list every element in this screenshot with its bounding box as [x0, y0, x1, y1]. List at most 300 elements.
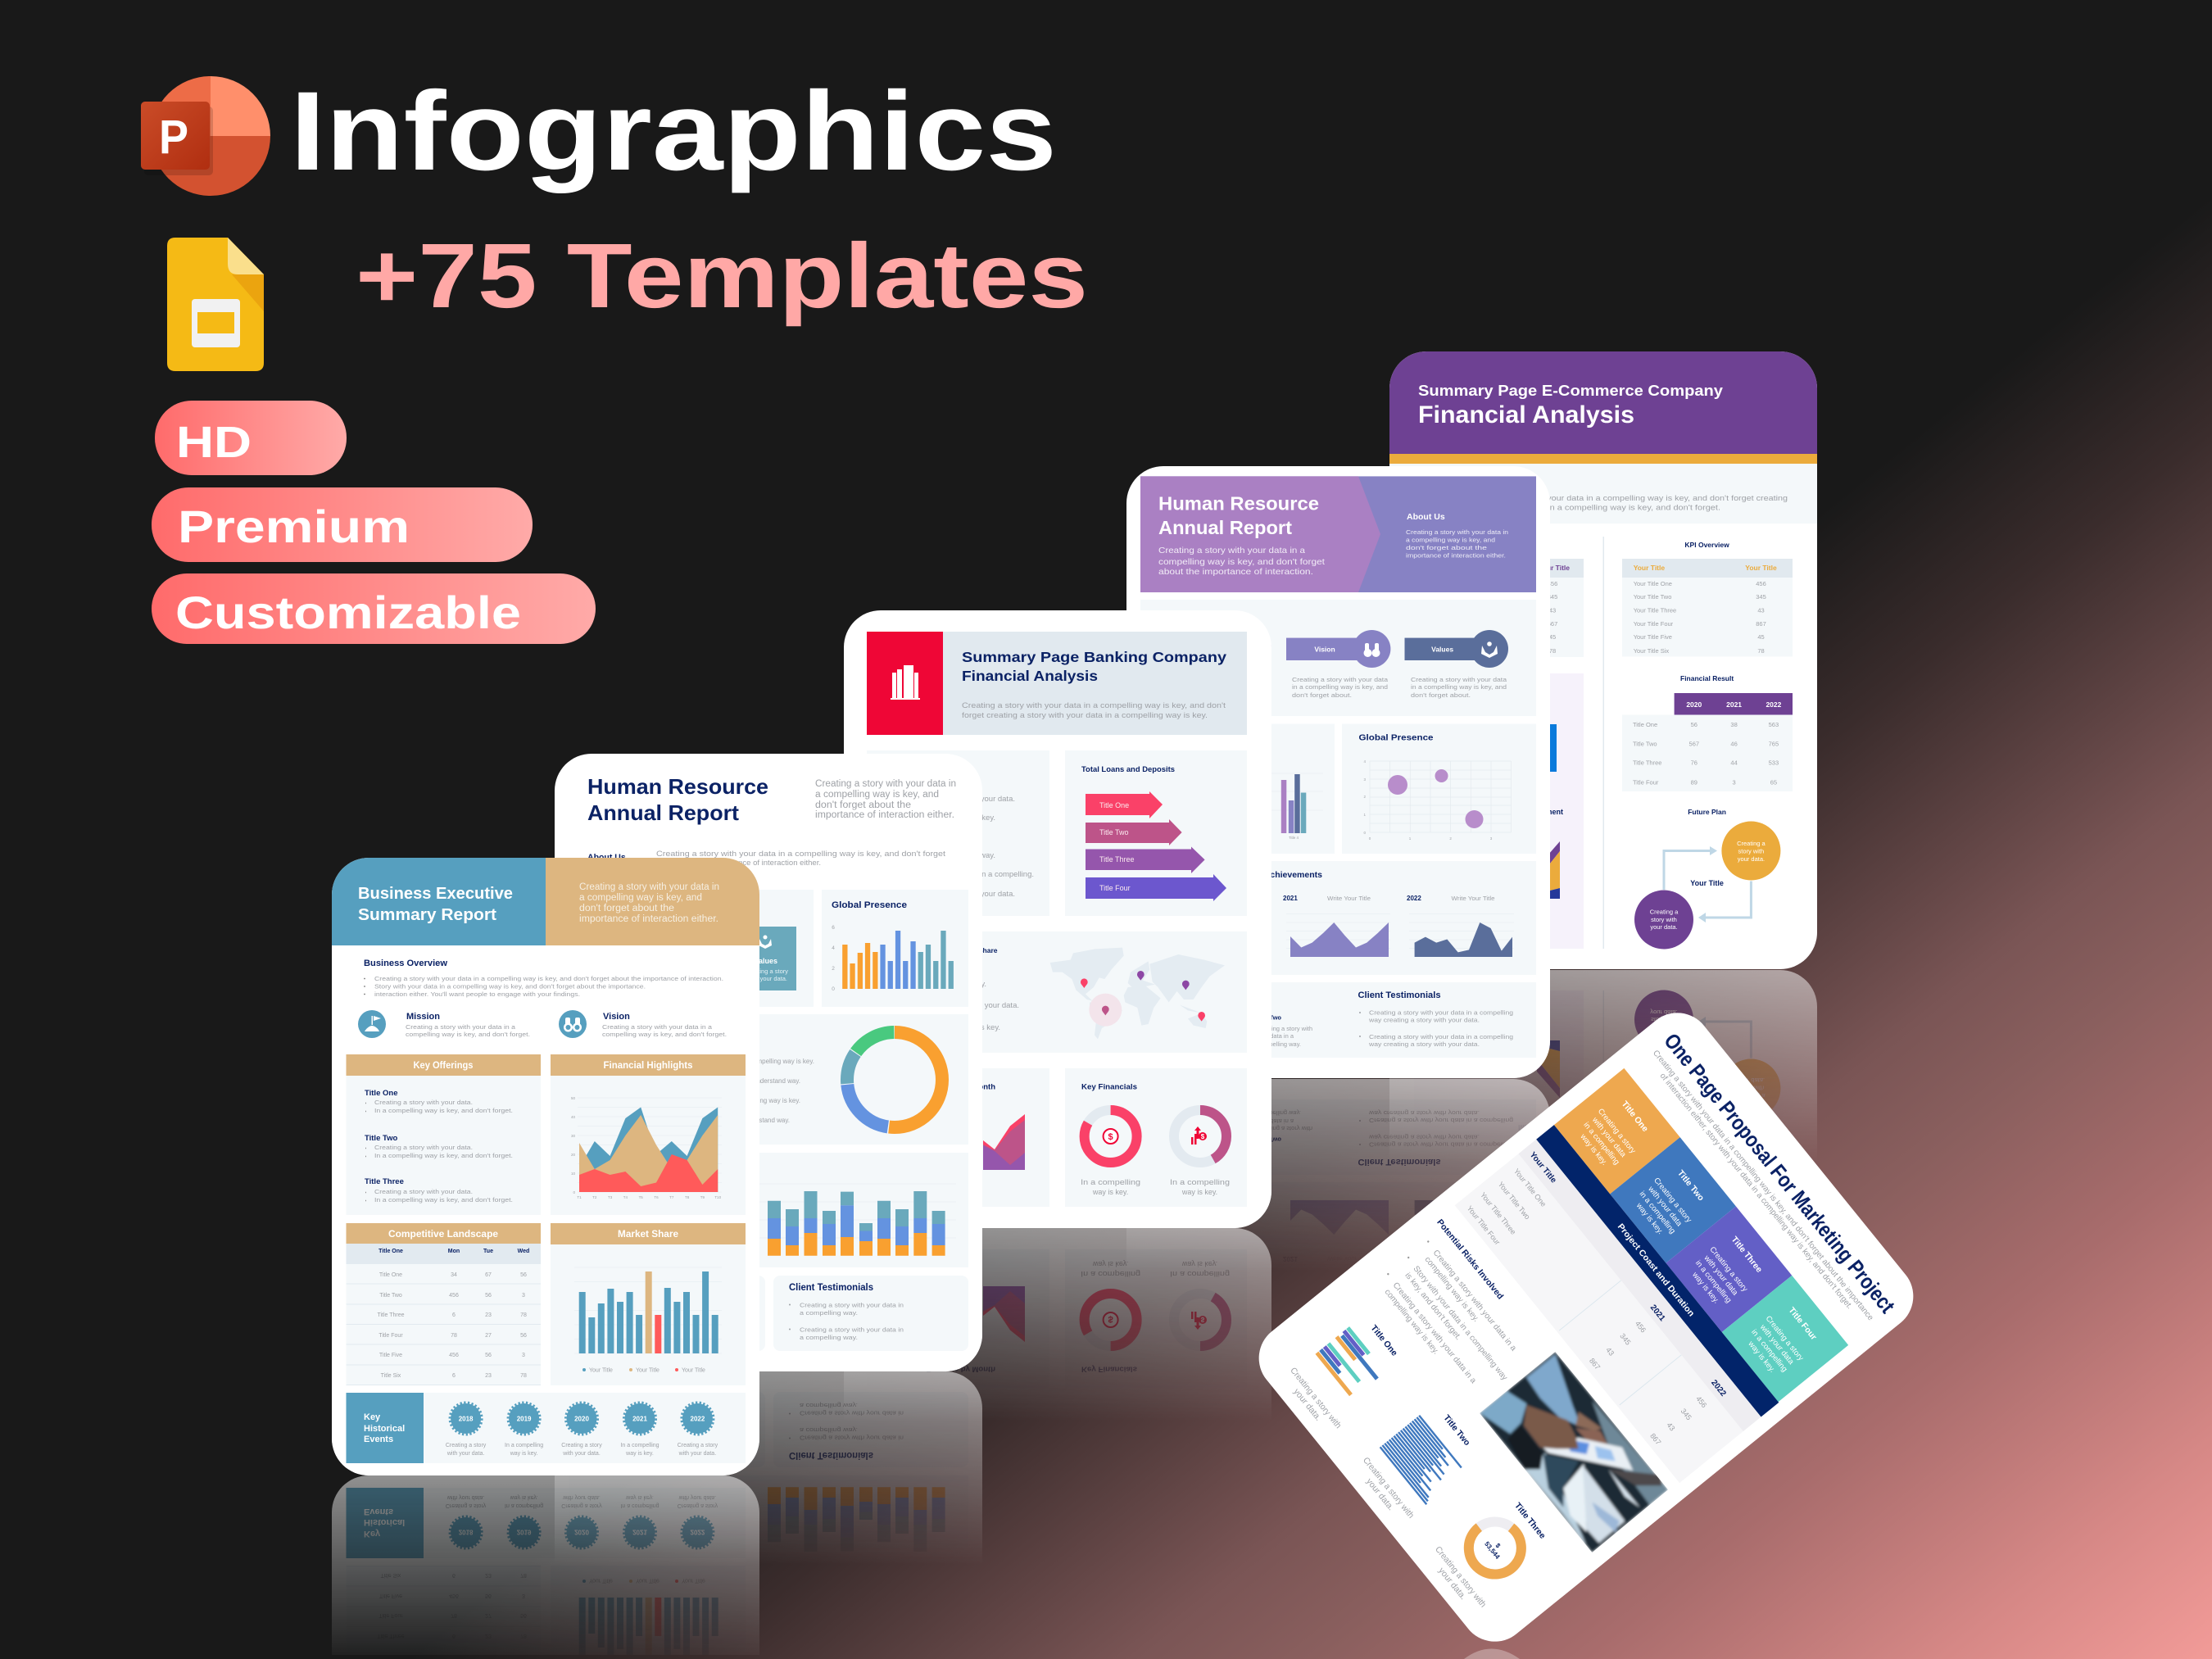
donut chart panel: Easy to understand way. — [729, 1077, 800, 1085]
financial result table: 38 — [1730, 721, 1738, 728]
mission: compelling way is key, and don't forget. — [406, 1032, 530, 1038]
stacked bar chart panel — [569, 1153, 968, 1267]
key offerings panel: Title Three — [365, 1177, 404, 1186]
key historical events timeline: with your data. — [446, 1451, 484, 1457]
arrows: total loans and deposits: Title Three — [1099, 855, 1135, 863]
left column partial table — [1550, 559, 1584, 657]
future plan diagram: story with — [1738, 847, 1764, 855]
vision and values panel: in a compelling way is key, and — [1411, 683, 1507, 691]
financial result table: 765 — [1769, 741, 1779, 748]
business overview: interaction either. You'll want people to engage with your findings. — [374, 992, 580, 998]
business overview: Story with your data in a compelling way is key, and don't forget about the importance. — [374, 985, 646, 990]
key financials rings: Key Financials — [1081, 1083, 1137, 1091]
project table: Your Title Four — [1466, 1204, 1502, 1246]
arrows: total loans and deposits — [1065, 750, 1247, 916]
header chevron: Creating a story with your data in — [1406, 528, 1508, 536]
values panel — [569, 890, 814, 1007]
four coloured title blocks: with your data — [1646, 1184, 1684, 1229]
vision and values panel: Creating a story with your data — [1292, 676, 1389, 683]
financial highlights area chart — [551, 1054, 746, 1215]
header: Summary Report — [358, 906, 496, 924]
table row: Title Two — [379, 1293, 525, 1299]
key offerings panel: Title Two — [365, 1134, 397, 1143]
vision and values panel: Vision — [1314, 646, 1335, 654]
competitive landscape table — [346, 1223, 541, 1296]
KPI overview table: 43 — [1757, 606, 1765, 614]
financial result table: 46 — [1730, 741, 1738, 748]
key historical events timeline: Creating a story — [678, 1443, 718, 1448]
arrows: total loans and deposits: Total Loans and Deposits — [1081, 765, 1175, 774]
four coloured title blocks: in a compelling — [1693, 1258, 1733, 1305]
financial result table: 89 — [1691, 778, 1698, 786]
financial result table: 533 — [1769, 759, 1779, 767]
financial result table: 2020 — [1686, 700, 1702, 709]
key achievements area charts: 2021 — [1283, 895, 1298, 902]
market share bars and legend: Your Title — [636, 1368, 660, 1373]
vision and values panel: don't forget about. — [1411, 691, 1471, 699]
client testimonials panel: Creating a story with your data in — [800, 1326, 904, 1334]
left column partial table: 567 — [1548, 620, 1557, 628]
KPI overview table: Your Title Three — [1634, 606, 1676, 614]
world map panel: is key. — [979, 1023, 1000, 1032]
header chevron: importance of interaction either. — [1406, 552, 1506, 559]
financial result table: Title One — [1633, 721, 1657, 728]
financial highlights area chart: 20 — [571, 1153, 575, 1157]
testimonials panel: Title Two — [1255, 1014, 1281, 1021]
key achievements area charts: Write Your Title — [1327, 895, 1371, 902]
four coloured title blocks: Title Four — [1787, 1305, 1819, 1342]
header chevron: compelling way is key, and don't forget — [1158, 557, 1325, 567]
four coloured title blocks: Creating a story — [1652, 1176, 1693, 1225]
competitive landscape table: Title One — [379, 1272, 402, 1278]
table rows: 78 — [451, 1333, 457, 1339]
key achievements area charts: Key Achievements — [1246, 870, 1322, 880]
vision: compelling way is key, and don't forget. — [602, 1032, 727, 1038]
chart: title three donut: $ — [1494, 1542, 1503, 1550]
KPI overview table: 78 — [1757, 647, 1765, 655]
four coloured title blocks: Creating a story — [1707, 1245, 1749, 1294]
KPI overview table: 456 — [1756, 580, 1766, 587]
left column partial table: 45 — [1549, 633, 1556, 641]
KPI overview table: Your Title One — [1634, 580, 1672, 587]
testimonials panel — [1140, 982, 1536, 1058]
financial highlights area chart: 30 — [571, 1134, 575, 1138]
KPI overview table: Your Title Six — [1634, 647, 1669, 655]
chart: title two: Creating a story with — [1361, 1456, 1416, 1521]
card: Human Resource Annual Report purple — [1126, 466, 1550, 1078]
client testimonials panel: Creating a story with your data in — [800, 1301, 904, 1309]
key financials rings: $ — [1201, 1133, 1205, 1140]
client testimonials panel: a compelling way. — [800, 1334, 858, 1341]
arrows: total loans and deposits: Title Two — [1099, 828, 1129, 836]
key financials rings: In a compelling — [1081, 1178, 1140, 1186]
testimonials panel: Creating a story with — [1257, 1025, 1312, 1032]
market share bars and legend: Your Title — [589, 1368, 613, 1373]
financial result table: Title Two — [1633, 741, 1657, 748]
header band — [1389, 351, 1817, 464]
market share bars and legend — [551, 1296, 746, 1385]
left column partial table: 345 — [1548, 593, 1557, 601]
badge: Customizable — [152, 573, 596, 644]
header chevron: Human Resource — [1158, 493, 1319, 514]
icon: PowerPoint logo — [141, 76, 270, 196]
table rows: Title Six — [381, 1373, 401, 1379]
financial result table: 76 — [1691, 759, 1698, 767]
project table: 345 — [1618, 1332, 1632, 1347]
world map panel: your data. — [985, 1001, 1019, 1010]
financial result table: Title Three — [1633, 759, 1661, 767]
financial highlights area chart: T9 — [700, 1195, 705, 1199]
project table: 2021 — [1648, 1303, 1667, 1323]
table rows: 456 — [449, 1353, 459, 1358]
chart: title one — [1280, 1309, 1412, 1437]
values panel: Creating a story — [745, 968, 788, 975]
KPI overview table: Your Title — [1745, 564, 1777, 572]
key financials rings: $ — [1108, 1132, 1113, 1142]
chart: title one: Title One — [1369, 1323, 1399, 1358]
header: Creating a story with your data in a compelling way is key, and don't — [962, 701, 1226, 710]
key offerings panel: Key Offerings — [413, 1059, 474, 1071]
competitive landscape table: Competitive Landscape — [388, 1228, 498, 1240]
key offerings panel: Creating a story with your data. — [374, 1145, 473, 1151]
header: Creating a story with your data in — [579, 882, 719, 892]
future plan diagram: Your Title — [1690, 879, 1724, 887]
title: Infographics — [290, 69, 1057, 194]
intro text panel: Creating a story with your data in a compelling way is key, and don't forget creating — [1464, 494, 1788, 503]
KPI overview table: Your Title Five — [1634, 633, 1672, 641]
arrows: total loans and deposits: Title One — [1099, 801, 1129, 809]
client testimonials panel: a compelling way. — [800, 1309, 858, 1317]
four coloured title blocks: Title Two — [1675, 1168, 1706, 1203]
donut chart panel — [569, 1014, 968, 1145]
chart: title one: your data. — [1291, 1387, 1323, 1423]
table row: Title Two: 56 — [485, 1293, 492, 1299]
project table: 43 — [1604, 1346, 1616, 1358]
area chart panel: Revenue by Month — [927, 1083, 995, 1091]
chart: title two: your data. — [1364, 1476, 1396, 1512]
four coloured title blocks: way is key. — [1634, 1201, 1665, 1236]
table row: Title Two: 3 — [522, 1293, 525, 1299]
key historical events timeline: Historical — [364, 1424, 405, 1434]
global presence bar chart — [822, 890, 968, 1007]
chart: title three donut: Creating a story with — [1433, 1544, 1488, 1610]
key historical events timeline: Key — [364, 1412, 381, 1422]
four coloured title blocks: with your data — [1757, 1322, 1796, 1367]
project table: 43 — [1665, 1421, 1677, 1432]
key historical events timeline: 2019 — [517, 1416, 532, 1422]
business overview: Creating a story with your data in a compelling way is key, and don't forget about the importance of interaction. — [374, 977, 723, 982]
vision and values panel: Values — [1431, 646, 1453, 654]
KPI overview table: 345 — [1756, 593, 1766, 601]
key offerings panel: In a compelling way is key, and don't forget. — [374, 1198, 513, 1203]
four coloured title blocks: with your data — [1702, 1253, 1740, 1298]
values panel: Values — [754, 957, 777, 965]
four coloured title blocks: with your data — [1589, 1115, 1628, 1159]
project table: 345 — [1679, 1407, 1693, 1421]
financial result table: 567 — [1689, 741, 1699, 748]
lower card sections — [844, 926, 1271, 1228]
icon: PowerPoint logo: P — [159, 111, 188, 164]
global presence bubble chart: 0 — [1369, 836, 1371, 841]
header band: Summary Page E-Commerce Company — [1418, 383, 1723, 399]
financial highlights area chart: Financial Highlights — [603, 1059, 693, 1071]
vision: Creating a story with your data in a — [602, 1025, 712, 1031]
table rows: 56 — [520, 1333, 527, 1339]
left column partial table: 456 — [1548, 580, 1557, 587]
table row: Title Two: Title Two — [379, 1293, 402, 1299]
header chevron: a compelling way is key, and — [1406, 536, 1495, 544]
key offerings panel: In a compelling way is key, and don't forget. — [374, 1108, 513, 1114]
key offerings panel: In a compelling way is key, and don't forget. — [374, 1154, 513, 1159]
left list panel: your data. — [981, 795, 1015, 804]
left list panel: in a compelling. — [980, 870, 1034, 879]
project table: 456 — [1694, 1394, 1708, 1409]
financial result table: 2021 — [1726, 700, 1742, 709]
financial highlights area chart: T5 — [639, 1195, 643, 1199]
potential risks — [1369, 1217, 1547, 1405]
world map panel: key. — [972, 980, 986, 989]
chart: title two: Title Two — [1441, 1413, 1472, 1448]
key financials rings: way is key. — [1092, 1188, 1128, 1196]
about us: about the importance of interaction either. — [678, 859, 821, 868]
key historical events timeline: way is key. — [510, 1451, 538, 1457]
key offerings panel: Creating a story with your data. — [374, 1190, 473, 1195]
financial highlights area chart: T7 — [669, 1195, 674, 1199]
key historical events timeline: 2020 — [574, 1416, 589, 1422]
key financials rings — [1065, 1068, 1247, 1207]
card: Summary Page E-Commerce Company — [1389, 351, 1817, 969]
financial highlights area chart: 40 — [571, 1115, 575, 1119]
financial highlights area chart: T4 — [623, 1195, 628, 1199]
future plan diagram: story with — [1651, 916, 1677, 923]
global presence bar chart: 6 — [832, 925, 835, 931]
market share bar chart: Market Share — [618, 1228, 678, 1240]
photo: hands on tablet — [1480, 1352, 1668, 1552]
card body sections — [1126, 596, 1550, 1078]
card: Business Executive Summary Report — [332, 858, 759, 1475]
testimonials panel: way creating a story with your data. — [1368, 1040, 1480, 1048]
market share bars and legend: Your Title — [682, 1368, 705, 1373]
vision and values panel: don't forget about. — [1292, 691, 1352, 699]
partial bar chart panel — [1271, 724, 1335, 854]
financial highlights area chart: T2 — [592, 1195, 597, 1199]
about us: About Us — [587, 852, 626, 862]
testimonials panel: way creating a story with your data. — [1368, 1016, 1480, 1024]
project table: 867 — [1648, 1432, 1662, 1447]
financial result table: 3 — [1733, 778, 1736, 786]
project table: Your Title — [1528, 1150, 1558, 1185]
testimonials panel: your data in a — [1257, 1032, 1294, 1040]
future plan diagram: Creating a — [1650, 908, 1679, 916]
key historical events timeline: Events — [364, 1435, 393, 1444]
badge: HD — [155, 401, 347, 475]
card: Summary Page Banking Company — [844, 610, 1271, 1228]
table rows — [346, 1296, 541, 1385]
header — [867, 632, 1247, 735]
chart: title three donut: your data. — [1436, 1566, 1468, 1602]
four coloured title blocks: Creating a story — [1596, 1107, 1638, 1155]
table rows: Title Five — [379, 1353, 402, 1358]
chart: title one: Creating a story with — [1288, 1366, 1344, 1430]
financial highlights area chart: 50 — [571, 1096, 575, 1100]
lower card sections — [332, 1296, 759, 1475]
four coloured title blocks: in a compelling — [1581, 1121, 1621, 1167]
heading: Human Resource — [587, 774, 768, 799]
KPI overview table: Your Title — [1634, 564, 1665, 572]
four coloured title blocks: Creating a story — [1764, 1314, 1806, 1362]
table rows: 78 — [520, 1312, 527, 1318]
chart: title three donut: Title Three — [1512, 1501, 1548, 1541]
four coloured title blocks: in a compelling — [1749, 1328, 1789, 1374]
global presence bar chart: 4 — [832, 945, 835, 951]
badge: Premium — [152, 487, 533, 562]
table rows: 56 — [485, 1353, 492, 1358]
table rows: 3 — [522, 1353, 525, 1358]
key historical events timeline: 2018 — [459, 1416, 474, 1422]
chart: title two — [1353, 1399, 1485, 1527]
left column chart panel — [1519, 673, 1584, 1131]
project table — [1455, 1140, 1761, 1483]
financial highlights area chart: T6 — [654, 1195, 659, 1199]
vision and values panel — [1140, 600, 1536, 716]
key offerings panel: Title One — [365, 1089, 397, 1098]
table rows: 6 — [452, 1373, 456, 1379]
table rows: 27 — [485, 1333, 492, 1339]
four coloured title blocks: way is key. — [1746, 1339, 1777, 1375]
lower card sections — [555, 1149, 982, 1371]
financial highlights area chart: T1 — [577, 1195, 582, 1199]
key historical events timeline: 2021 — [632, 1416, 647, 1422]
KPI overview table: Your Title Four — [1634, 620, 1674, 628]
competitive landscape table: 56 — [520, 1272, 527, 1278]
competitive landscape table: Mon — [448, 1249, 460, 1254]
mission: Mission — [406, 1012, 440, 1022]
header chevron: don't forget about the — [1406, 544, 1487, 551]
table rows: 6 — [452, 1312, 456, 1318]
potential risks: Creating a story with your data in a — [1431, 1249, 1518, 1353]
financial result table — [1622, 674, 1793, 791]
left column partial table: 43 — [1549, 606, 1556, 614]
header chevron: About Us — [1407, 512, 1445, 522]
four coloured title blocks: way is key. — [1690, 1270, 1720, 1305]
global presence bar chart: Global Presence — [832, 900, 907, 910]
icon: Google Slides logo — [167, 238, 264, 371]
left list panel — [867, 750, 1049, 916]
table rows: Title Three — [377, 1312, 405, 1318]
key historical events timeline: way is key. — [625, 1451, 654, 1457]
future plan diagram: your data. — [1650, 923, 1678, 931]
header: importance of interaction either. — [579, 914, 718, 924]
header: Summary Page Banking Company — [962, 649, 1226, 665]
intro text panel: a story with your data in a compelling way is key, and don't forget. — [1460, 503, 1720, 513]
navy band: Project Coast and Duration — [1616, 1222, 1697, 1318]
potential risks: Potential Risks Involved — [1435, 1217, 1505, 1301]
vision — [559, 1010, 727, 1038]
financial highlights area chart: T10 — [714, 1195, 722, 1199]
vision and values panel: in a compelling way is key, and — [1292, 683, 1388, 691]
header chevron — [1140, 476, 1536, 592]
financial result table: 44 — [1730, 759, 1738, 767]
table row: Title Two: 456 — [449, 1293, 459, 1299]
header — [332, 858, 759, 945]
chart: title three donut: 53,544 — [1483, 1540, 1502, 1561]
future plan diagram: Future Plan — [1688, 808, 1726, 816]
competitive landscape table: Title One — [378, 1249, 403, 1254]
card: One Page Proposal For Marketing Project — [1245, 999, 1927, 1656]
key historical events timeline: In a compelling — [505, 1443, 543, 1448]
business overview — [364, 959, 723, 998]
four coloured title blocks: way is key. — [1578, 1131, 1609, 1167]
vision: Vision — [603, 1012, 630, 1022]
header: Financial Analysis — [962, 668, 1098, 684]
potential risks: Creating a story with your data in a — [1391, 1281, 1478, 1385]
future plan diagram — [1634, 808, 1780, 949]
intro text panel — [1389, 464, 1817, 524]
testimonials panel: compelling way. — [1258, 1040, 1301, 1048]
badge: Premium: Premium — [178, 501, 410, 552]
key historical events timeline: Creating a story — [446, 1443, 487, 1448]
project table: Your Title One — [1512, 1167, 1548, 1208]
four coloured title blocks: Title One — [1620, 1099, 1650, 1134]
financial highlights area chart: 0 — [573, 1190, 575, 1194]
key historical events timeline: In a compelling — [620, 1443, 660, 1448]
project table: 867 — [1588, 1357, 1602, 1371]
financial result table: 2022 — [1766, 700, 1782, 709]
key achievements area charts: 2022 — [1407, 895, 1421, 902]
table rows: Title Four — [378, 1333, 403, 1339]
global presence bubble chart: 1 — [1409, 836, 1412, 841]
project table: Your Title Three — [1479, 1190, 1517, 1236]
global presence bubble chart: Global Presence — [1358, 734, 1434, 743]
global presence bubble chart: 1 — [1363, 813, 1366, 817]
competitive landscape table: 67 — [485, 1272, 492, 1278]
potential risks: compelling way is key. — [1383, 1288, 1440, 1356]
key financials rings: way is key. — [1181, 1188, 1217, 1196]
world map panel — [867, 931, 1247, 1053]
KPI overview table: 45 — [1757, 633, 1765, 641]
header: don't forget about the — [579, 904, 674, 913]
world map panel: Market Share — [954, 946, 998, 954]
four coloured title blocks: in a compelling — [1638, 1190, 1677, 1235]
intro text: a compelling way is key, and — [815, 790, 939, 800]
future plan diagram: Creating a — [1737, 840, 1766, 847]
header: Business Executive — [358, 885, 513, 903]
heading: Annual Report — [587, 800, 739, 825]
client testimonials panel — [569, 1276, 968, 1351]
global presence bubble chart: 3 — [1490, 836, 1493, 841]
competitive landscape table: Wed — [518, 1249, 529, 1254]
financial highlights area chart: T3 — [608, 1195, 613, 1199]
global presence bubble chart: 3 — [1363, 777, 1366, 782]
key offerings panel — [346, 1054, 541, 1215]
financial highlights area chart: 10 — [571, 1172, 575, 1176]
key historical events timeline — [346, 1393, 746, 1463]
project table: Your Title Two — [1497, 1180, 1532, 1221]
area chart panel — [867, 1068, 1049, 1207]
badge: HD: HD — [176, 418, 252, 467]
intro text — [815, 779, 956, 820]
badge: Customizable: Customizable — [175, 587, 521, 638]
left column partial table: 78 — [1549, 647, 1556, 655]
financial result table: 65 — [1770, 778, 1777, 786]
table rows: 23 — [485, 1373, 492, 1379]
values panel: with your data. — [746, 975, 787, 982]
donut chart panel: Easy to understand way. — [718, 1117, 790, 1124]
global presence bubble chart: 2 — [1363, 795, 1366, 799]
financial result table: 563 — [1769, 721, 1779, 728]
global presence bubble chart — [1342, 724, 1536, 854]
mission: Creating a story with your data in a — [406, 1025, 515, 1031]
